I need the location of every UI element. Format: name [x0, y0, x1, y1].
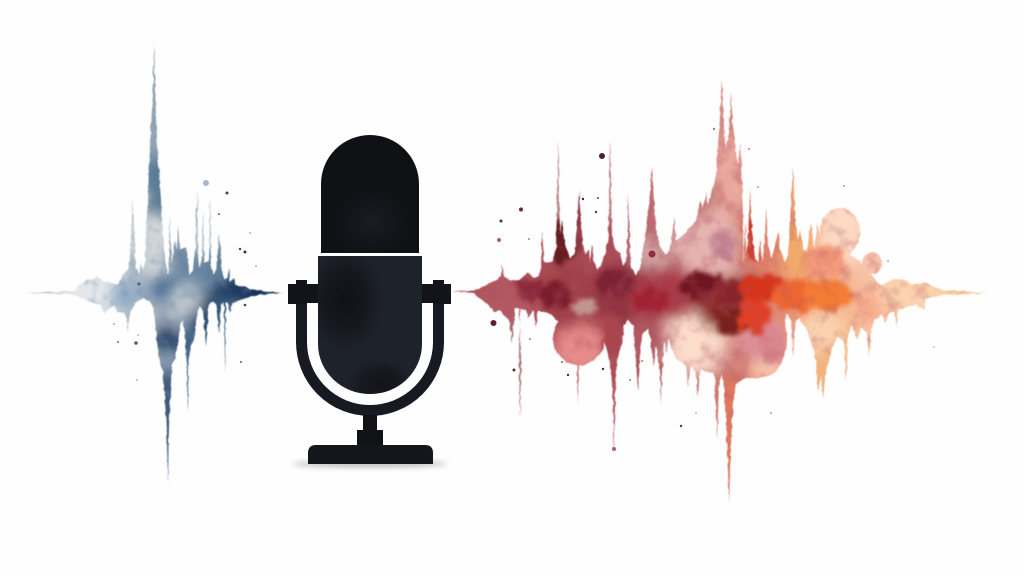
stand stem	[357, 415, 383, 446]
fine pigment blooms	[517, 190, 852, 452]
mic capsule	[320, 134, 420, 256]
illustration: microphone between watercolor sound waves	[30, 45, 987, 502]
right sound wave: red to orange watercolor	[450, 70, 995, 510]
microphone	[288, 134, 451, 464]
left sound wave: blue watercolor	[30, 45, 282, 482]
mottling	[480, 240, 770, 340]
right splatter dots	[490, 128, 935, 451]
left bracket	[288, 280, 318, 304]
stand base	[308, 445, 433, 464]
right bracket	[422, 280, 451, 304]
mottling	[90, 150, 280, 380]
mic body	[318, 256, 422, 394]
wide cloud wash	[63, 50, 264, 492]
yoke	[302, 282, 438, 410]
left splatter dots	[113, 180, 257, 381]
microphone shadow	[292, 461, 448, 467]
wide cloud wash	[488, 86, 903, 500]
